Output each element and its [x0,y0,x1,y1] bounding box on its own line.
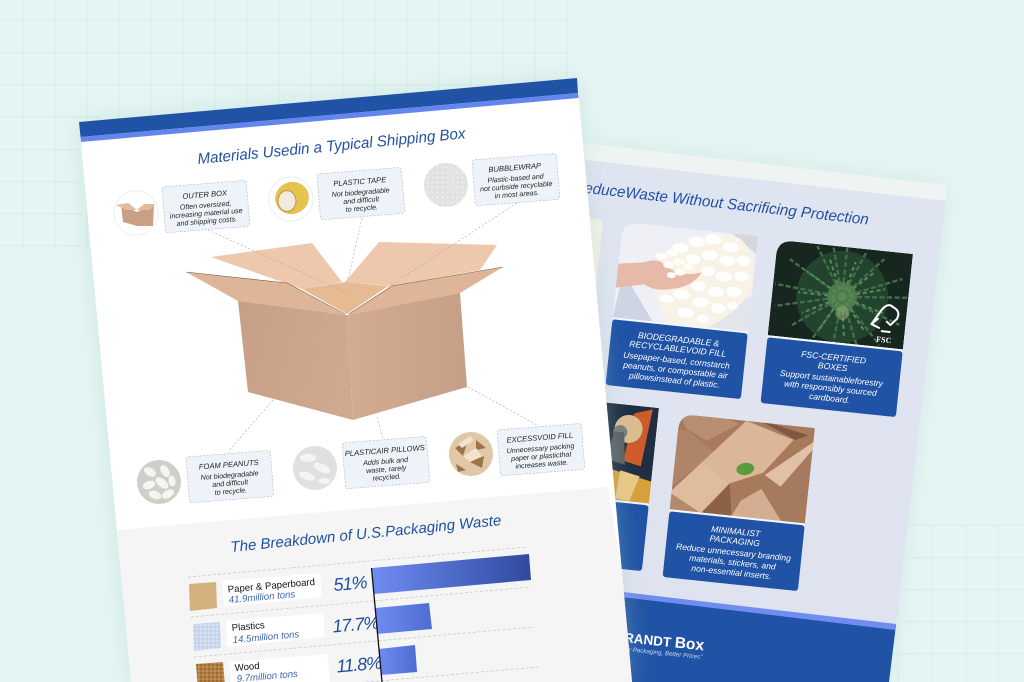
row: plastics: 14.5million tons [232,629,300,646]
row dividers [188,547,538,682]
header band [79,78,578,142]
callout: bubble wrap: in most areas. [494,189,539,200]
row: plastics: 17.7% [332,612,380,636]
footer band [600,592,896,682]
callout: excess void fill: EXCESSVOID FILL [506,431,573,445]
card text: materials, stickers, and [689,553,776,572]
callout: excess void fill: increases waste. [515,459,569,471]
callout: outer box: increasing material use [170,207,243,220]
row: wood: 11.8% [336,653,383,676]
icon: air pillows [293,446,337,490]
row: plastics: Plastics [231,620,265,634]
card: minimalist packaging [663,414,815,591]
heading: materials: Materials Usedin a Typical Shipping Box [197,125,467,168]
tagline: Better Packaging, Better Prices” [614,645,703,661]
icon: small box [114,191,158,235]
card text: PACKAGING [709,533,761,548]
card text: BOXES [817,360,848,373]
bar: plastics [375,603,432,634]
icon: void fill paper [449,432,493,476]
card text [674,520,794,583]
card text [777,347,886,409]
row: paper and paperboard: 51% [333,572,368,595]
callout: excess void fill [497,423,585,476]
card text: MINIMALIST [711,524,761,539]
card text: FSC-CERTIFIED [801,349,867,366]
heading: breakdown: The Breakdown of U.S.Packaging Waste [230,512,502,556]
bar: paper [372,554,531,594]
bar: wood [379,645,417,675]
row: paper and paperboard: 41.9million tons [228,589,296,606]
heading: reduce waste: ReduceWaste Without Sacrificing Protection [573,179,870,229]
callout: bubble wrap: BUBBLEWRAP [488,161,542,174]
callout: plastic tape: and difficult [343,195,380,206]
callout: outer box: OUTER BOX [182,188,228,201]
row: plastics [193,612,380,651]
callout: foam peanuts: Not biodegradable [200,469,259,482]
panel: packaging waste breakdown [100,487,640,682]
card text: non-essential inserts. [691,563,772,581]
card: FSC boxes [761,240,913,417]
axis [372,568,382,682]
callout: plastic tape [317,167,405,220]
callout: outer box: Often oversized, [180,200,232,212]
callout: foam peanuts [186,450,274,503]
row: wood [196,653,383,682]
callout: foam peanuts: and difficult [212,478,249,489]
callout: plastic air pillows: waste, rarely [366,464,407,475]
row: wood: Wood [234,661,260,674]
card text: pillowsinstead of plastic. [628,370,720,390]
card text: cardboard. [809,391,850,405]
callout: plastic tape: Not biodegradable [331,186,390,199]
card text: Reduce unnecessary branding [676,541,792,563]
callout: plastic tape: PLASTIC TAPE [333,175,387,188]
leader lines [208,203,537,452]
bar chart [372,554,531,682]
icon: foam peanuts [137,460,181,504]
callout: bubble wrap: not curbside recyclable [480,180,553,193]
callout: foam peanuts: to recycle. [214,486,247,497]
callout: plastic air pillows: PLASTICAIR PILLOWS [344,443,425,458]
card text: RECYCLABLEVOID FILL [629,339,727,359]
callout: plastic air pillows [342,436,430,489]
panel: left document [79,78,640,682]
icon: tape roll [269,177,313,221]
card: tape application (partly hidden) [606,402,659,571]
icon: FSC logo [869,304,899,346]
card text: BIODEGRADABLE & [638,330,720,349]
row: paper and paperboard: Paper & Paperboard [227,577,315,595]
card text: peanuts, or compostable air [622,360,729,381]
card: biodegradable fill [606,222,758,399]
callout: excess void fill: paper or plasticthat [510,450,573,463]
callout: outer box [162,180,250,233]
callout: bubble wrap: Plastic-based and [487,172,545,185]
card text: Usepaper-based, cornstarch [623,350,731,371]
callout: bubble wrap [472,153,560,206]
illustration: open cardboard box [186,242,503,420]
callout: foam peanuts: FOAM PEANUTS [199,458,259,472]
card text: with responsibly sourced [784,378,878,398]
card text: Support sustainableforestry [780,368,884,389]
row: paper and paperboard [189,572,368,611]
callout: excess void fill: Unnecessary packing [506,442,575,455]
card text [621,329,733,391]
panel: right document [584,144,946,682]
icon: bubble wrap [424,163,468,207]
brand name: BRANDT Box [614,628,705,654]
hidden card sliver [585,218,603,300]
callout: outer box: and shipping costs. [176,215,237,228]
callout: plastic air pillows: Adds bulk and [362,456,409,467]
callout: plastic tape: to recycle. [345,203,378,214]
icon: FSC logo: FSC [876,335,892,345]
callout: plastic air pillows: recycled. [372,472,401,483]
